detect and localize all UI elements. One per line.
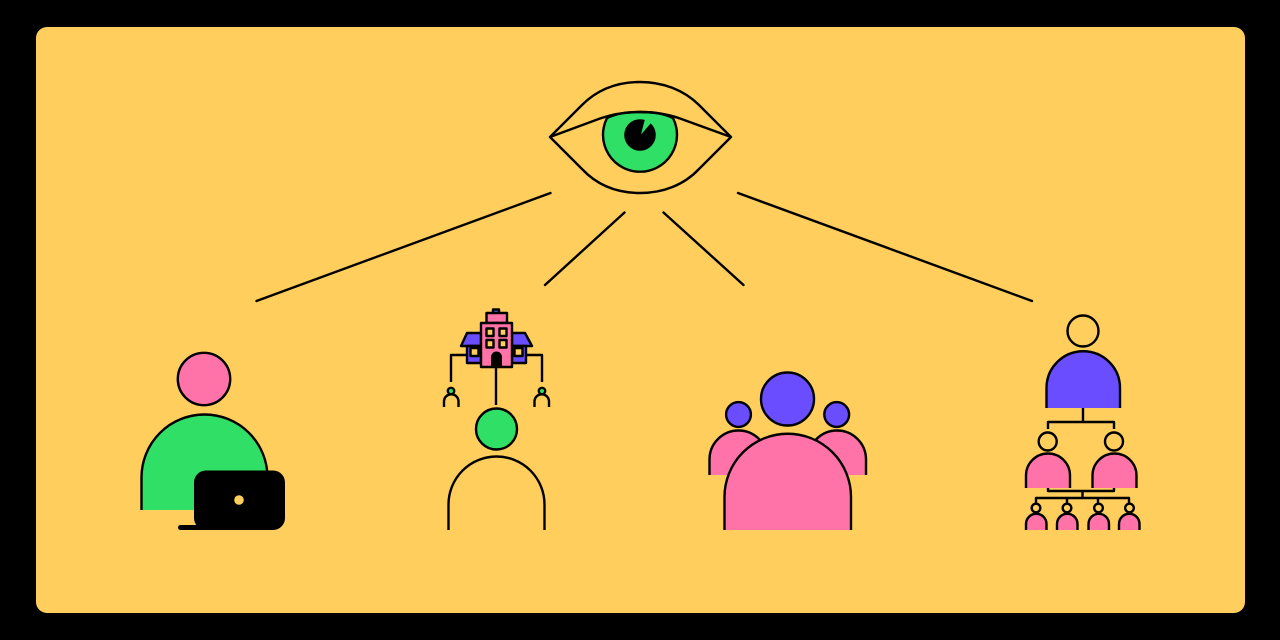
- small figure right: [534, 388, 549, 407]
- middle person right: [1092, 432, 1136, 488]
- middle person left: [1026, 432, 1070, 488]
- bottom person 3: [1088, 504, 1109, 530]
- top person: [1046, 316, 1120, 408]
- iris: [603, 112, 677, 172]
- small figure left: [444, 388, 458, 407]
- connector lines: [1036, 408, 1129, 503]
- icon: person under organisation: [444, 310, 549, 530]
- icon: person with laptop: [142, 353, 285, 530]
- arrow: sight line to hierarchy: [738, 193, 1032, 301]
- bottom person 1: [1026, 504, 1046, 530]
- upper eyelid: [550, 112, 731, 137]
- laptop: [178, 470, 285, 530]
- arrow: sight line to group: [664, 212, 744, 285]
- icon: organisational hierarchy: [1026, 316, 1140, 530]
- arrow: sight line to individual: [256, 193, 550, 301]
- connector lines: [451, 355, 542, 405]
- bottom person 4: [1119, 504, 1140, 530]
- pupil: [624, 119, 656, 151]
- icon: eye: [550, 82, 731, 193]
- icon: group of three people: [710, 372, 866, 530]
- bottom person 2: [1057, 504, 1078, 530]
- arrow: sight line to organisation: [545, 212, 624, 285]
- building: [461, 310, 532, 367]
